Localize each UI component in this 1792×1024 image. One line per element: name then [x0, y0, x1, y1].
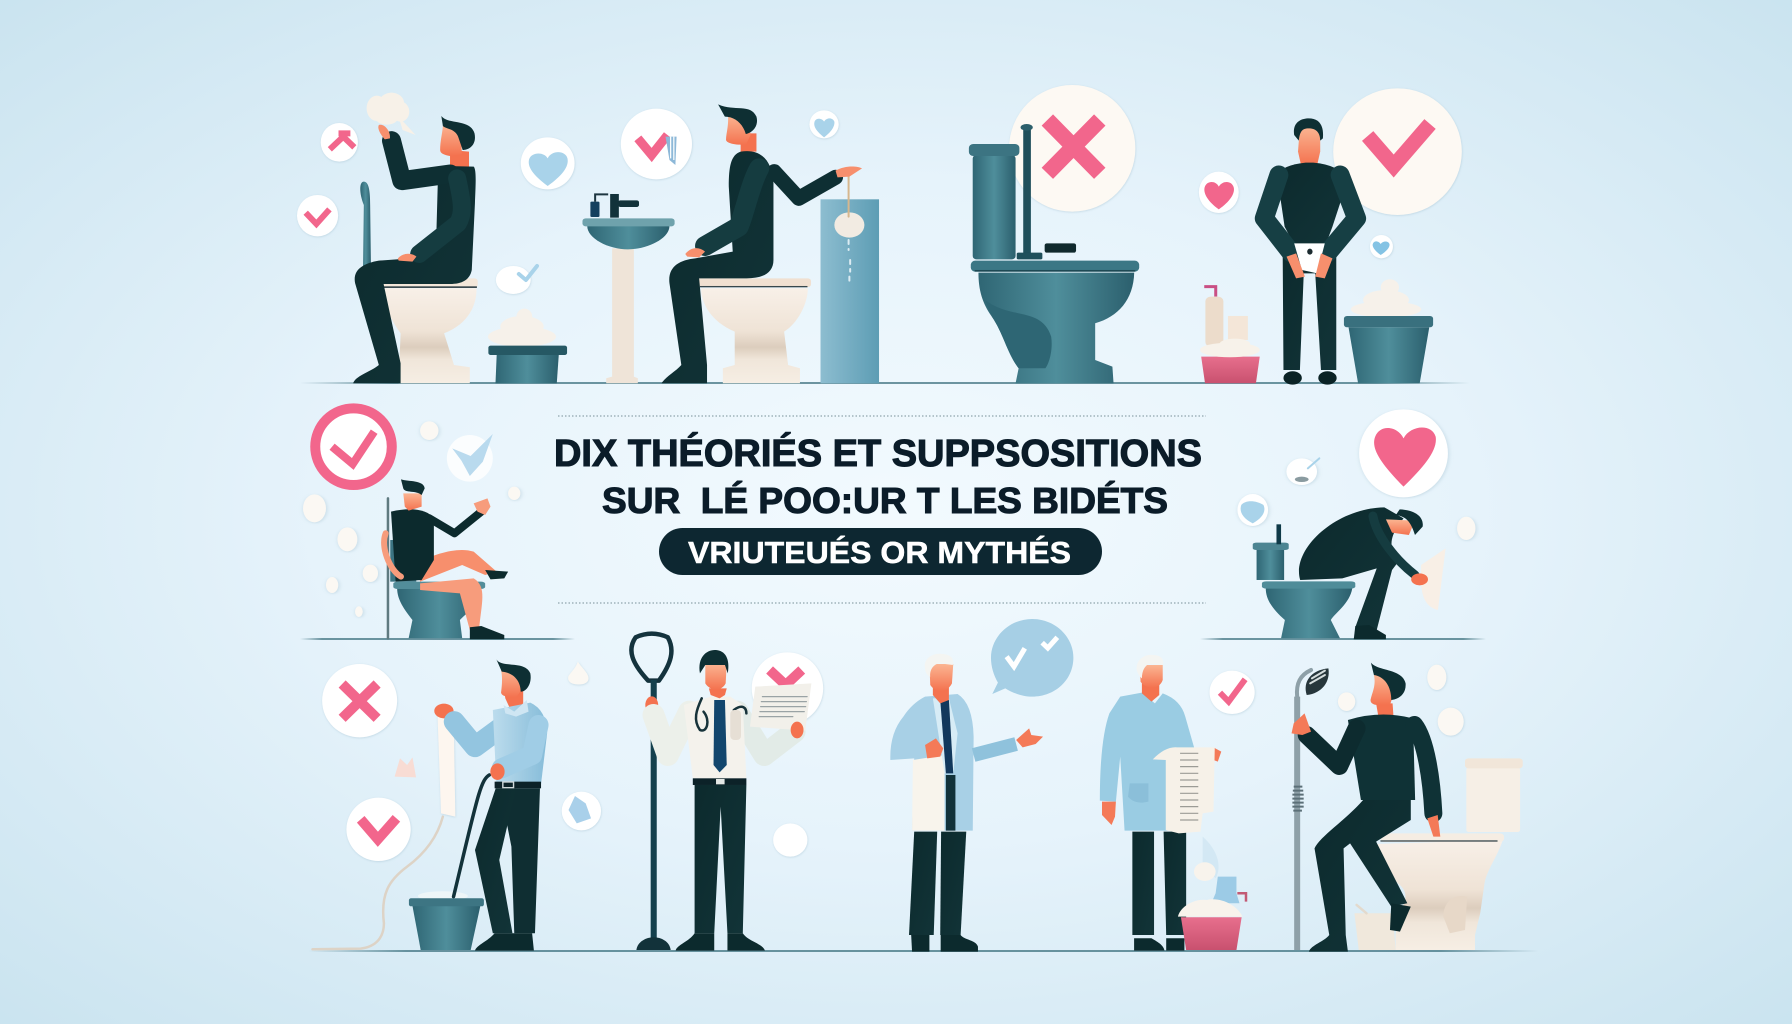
teal bucket with foam [1344, 279, 1433, 383]
badge: check with brush [621, 109, 692, 179]
doctor with paper [654, 650, 811, 951]
badge: blue drop [1237, 494, 1268, 526]
toilet left [388, 498, 485, 638]
hose [312, 817, 443, 949]
ground line: top row [300, 382, 1470, 384]
speech bubble with ticks [991, 619, 1073, 697]
title line 2: SUR LÉ POO:UR T LES BIDÉTS [602, 480, 1168, 521]
badge: chevron check [346, 798, 411, 861]
doctor talking [890, 654, 1043, 952]
bottle and pink tub [1200, 287, 1260, 383]
scene: bottom right, doctors and man on toilet [890, 619, 1523, 952]
dotted rule top [558, 415, 1206, 417]
ground line: middle left [300, 638, 575, 640]
badge: pink ring check [315, 408, 392, 485]
ground line: middle right [1200, 638, 1486, 640]
badge: check [1210, 671, 1255, 714]
badge: blue bird [447, 434, 493, 482]
scene: middle row, side figures [303, 408, 1475, 639]
foam dot right [1457, 517, 1475, 540]
toilet tank and lever [969, 124, 1076, 259]
toilet cream with tank [1354, 758, 1523, 950]
pill subtitle: VRIUTEUÉS OR MYTHÉS [688, 535, 1071, 570]
man 1 [353, 116, 476, 383]
toilet bowl [971, 261, 1139, 383]
foam right with tick [1286, 458, 1319, 485]
man with towel [434, 659, 547, 951]
badge: big check [1333, 88, 1462, 215]
man 2 [662, 104, 862, 383]
man seated with shower [1292, 663, 1440, 952]
bucket [409, 891, 484, 950]
foam pale pink [395, 757, 416, 777]
foam bits [1338, 665, 1464, 736]
badge: pink arrow [321, 123, 358, 162]
toilet backrest pole [360, 182, 371, 267]
foam cloud in hand [367, 93, 416, 135]
title block [554, 416, 1206, 603]
badge: blue heart [521, 137, 575, 189]
doctor with paper roll [1100, 655, 1221, 951]
flush panel with roll [821, 177, 879, 383]
white blob [773, 823, 807, 857]
scene: bottom left, man with mop and doctor with paper [312, 634, 823, 951]
pill subtitle [659, 528, 1102, 575]
dotted rule bottom [558, 602, 1206, 604]
foam drop [568, 662, 589, 684]
sink [582, 194, 675, 383]
scene: top left, man seated with foam and man seated by sink [297, 93, 879, 383]
shower pole [1292, 668, 1329, 950]
scene: top right, teal toilet and standing man [969, 85, 1462, 385]
badge: pink heart [1199, 172, 1239, 213]
toilet 2 [697, 278, 811, 383]
foam blob with tick [496, 266, 537, 294]
stethoscope pole [631, 634, 671, 950]
pink bucket with foam and blue nozzle [1178, 837, 1246, 950]
badge: small blue heart [1370, 235, 1393, 258]
man seated cross-legged [384, 479, 508, 639]
badge: chevron behind paper [752, 652, 823, 724]
toilet right [1253, 524, 1355, 638]
toilet 1 [379, 278, 478, 383]
mop handle [454, 775, 489, 897]
badge: check small [297, 195, 338, 236]
man bent over [1299, 507, 1446, 639]
badge: big pink heart [1359, 409, 1448, 497]
badge: blue towel [562, 792, 601, 830]
badge: small blue heart [809, 110, 839, 138]
badge: cross [322, 664, 397, 737]
ground line: bottom row [308, 950, 1538, 952]
title line 1: DIX THÉORIÉS ET SUPPSOSITIONS [554, 431, 1202, 475]
foam tub [488, 309, 567, 383]
foam bits left [303, 421, 520, 617]
badge: big cross [1009, 85, 1135, 212]
man standing [1264, 118, 1357, 385]
